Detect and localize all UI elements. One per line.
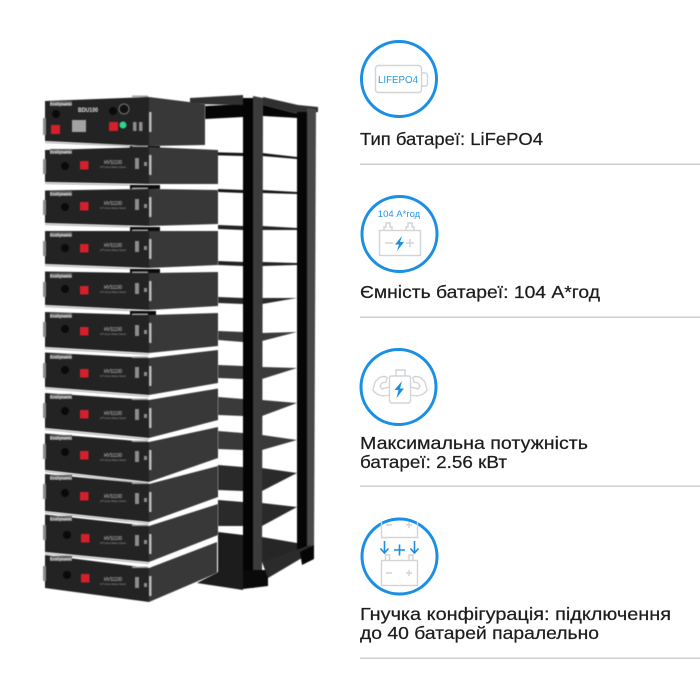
- module: HVS1100 11: LFP Lithium Battery Module: [100, 582, 126, 586]
- module: HVS1100 4: [43, 272, 218, 315]
- shelves: [197, 152, 305, 590]
- module: HVS1100 6: [43, 350, 218, 396]
- icon: LiFePO4 battery: LIFEPO4: [378, 74, 418, 86]
- module: HVS1100 7: EcoDynamic: [50, 394, 72, 399]
- icon: flexible configuration: [362, 519, 437, 594]
- back right post: [297, 108, 316, 560]
- module: HVS1100 8: EcoDynamic: [50, 435, 72, 440]
- module: HVS1100 4: EcoDynamic: [50, 273, 72, 278]
- text: battery power: Максимальна потужність: [360, 433, 588, 453]
- module: HVS1100 2: EcoDynamic: [50, 191, 72, 196]
- module: HVS1100 11: EcoDynamic: [50, 556, 72, 561]
- module: HVS1100 9: LFP Lithium Battery Module: [100, 499, 126, 503]
- module: HVS1100 9: HVS1100: [104, 494, 122, 500]
- icon: capacity battery: 104 А*год: [378, 209, 421, 220]
- module: HVS1100 1: LFP Lithium Battery Module: [100, 165, 126, 169]
- module: HVS1100 3: [43, 230, 218, 273]
- module: HVS1100 11: HVS1100: [104, 577, 122, 583]
- module: HVS1100 2: LFP Lithium Battery Module: [100, 206, 126, 210]
- module: HVS1100 5: EcoDynamic: [50, 313, 72, 318]
- module: HVS1100 3: EcoDynamic: [50, 232, 72, 237]
- module: BDU100: BDU100: [78, 108, 99, 114]
- text: battery power: [360, 433, 588, 472]
- module: HVS1100 5: [43, 312, 218, 354]
- rack frame: [190, 95, 318, 590]
- module: HVS1100 10: HVS1100: [104, 536, 122, 542]
- text: flexible configuration: до 40 батарей паралельно: [360, 623, 599, 643]
- text: battery power: батареї: 2.56 кВт: [360, 452, 507, 472]
- text: flexible configuration: Гнучка конфігурація: підключення: [360, 604, 671, 624]
- module: BDU100: [43, 96, 205, 150]
- front post: [243, 96, 263, 588]
- module: HVS1100 8: LFP Lithium Battery Module: [100, 458, 126, 462]
- icon: LiFePO4 battery: [362, 42, 436, 116]
- icon: battery power: [361, 350, 436, 424]
- module: HVS1100 8: HVS1100: [104, 453, 122, 459]
- module: HVS1100 5: LFP Lithium Battery Module: [100, 332, 126, 336]
- module: HVS1100 9: EcoDynamic: [50, 475, 72, 480]
- top beams: [190, 95, 318, 119]
- module: HVS1100 4: LFP Lithium Battery Module: [100, 290, 126, 294]
- module: HVS1100 7: HVS1100: [104, 411, 122, 417]
- battery stack: [43, 96, 218, 602]
- module: HVS1100 3: LFP Lithium Battery Module: [100, 248, 126, 252]
- module: HVS1100 7: [43, 388, 218, 440]
- module: HVS1100 6: HVS1100: [104, 369, 122, 375]
- icon: capacity battery: [362, 196, 437, 272]
- module: HVS1100 10: LFP Lithium Battery Module: [100, 541, 126, 545]
- module: HVS1100 1: [43, 146, 218, 189]
- module: HVS1100 7: LFP Lithium Battery Module: [100, 416, 126, 420]
- text: battery capacity: Ємність батареї: 104 А*год: [360, 282, 600, 302]
- module: HVS1100 4: HVS1100: [104, 285, 122, 291]
- module: BDU100: EcoDynamic: [50, 101, 72, 106]
- module: HVS1100 6: EcoDynamic: [50, 354, 72, 359]
- module: HVS1100 2: HVS1100: [104, 201, 122, 207]
- module: HVS1100 2: [43, 188, 218, 231]
- module: HVS1100 8: [43, 427, 218, 484]
- module: HVS1100 3: HVS1100: [104, 243, 122, 249]
- text: battery type: Тип батареї: LiFePO4: [360, 129, 543, 149]
- module: HVS1100 11: [43, 542, 217, 602]
- module: HVS1100 6: LFP Lithium Battery Module: [100, 374, 126, 378]
- base: [243, 545, 314, 589]
- module: HVS1100 5: HVS1100: [104, 327, 122, 333]
- module: HVS1100 10: [43, 504, 218, 564]
- module: HVS1100 1: EcoDynamic: [50, 149, 72, 154]
- text: flexible configuration: [360, 604, 671, 643]
- module: HVS1100 9: [43, 466, 218, 524]
- module: HVS1100 10: EcoDynamic: [50, 516, 72, 521]
- module: HVS1100 1: HVS1100: [104, 160, 122, 166]
